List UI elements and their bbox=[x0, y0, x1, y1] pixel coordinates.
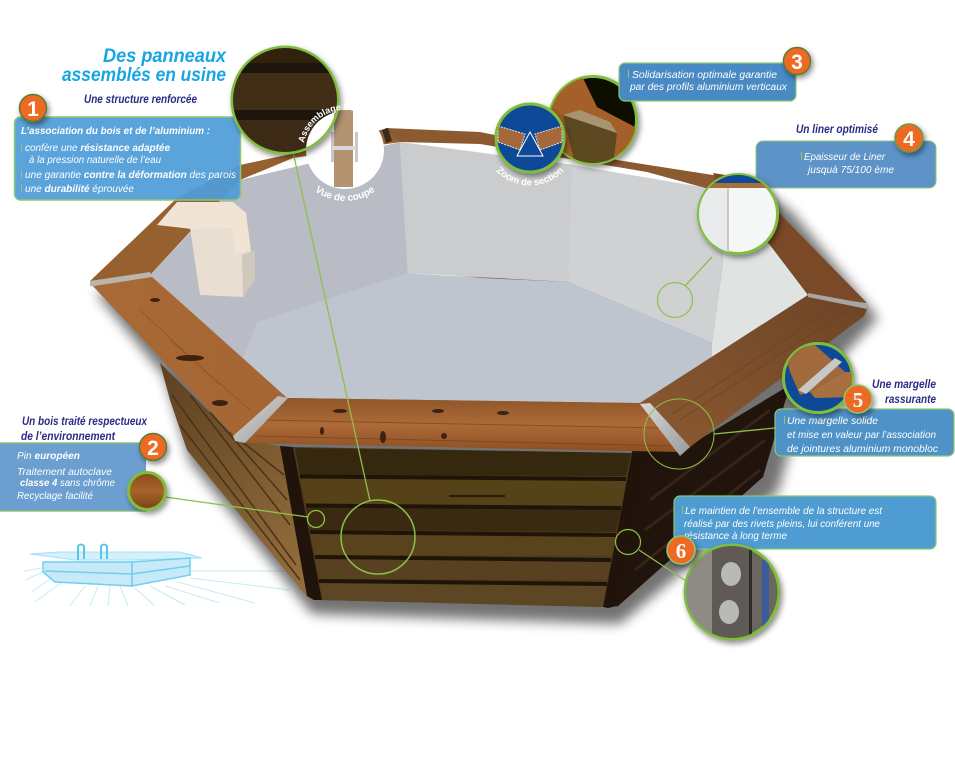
rim: upper left bbox=[90, 128, 400, 281]
heading: assemblés en usine bbox=[62, 65, 226, 86]
panel 5: margelle bbox=[775, 409, 954, 456]
liner floor bbox=[243, 273, 712, 403]
front wooden panel bbox=[293, 447, 632, 607]
badge 1 bbox=[20, 94, 46, 122]
vue de coupe circle: Vue de coupe bbox=[317, 185, 374, 201]
badge 2 bbox=[140, 434, 166, 460]
vue de coupe circle bbox=[306, 110, 384, 201]
panel 2: bois traité bbox=[0, 443, 146, 511]
margelle detail circle bbox=[784, 344, 855, 412]
badge 4 bbox=[895, 124, 923, 152]
assemblage label: Assemblage bois bbox=[298, 104, 353, 143]
panel 5: margelle: de jointures aluminium monobloc bbox=[787, 443, 939, 455]
badge 4: 4 bbox=[903, 128, 915, 151]
assemblage bois circle bbox=[228, 44, 346, 162]
heading bbox=[62, 46, 227, 86]
heading: margelle: Une margelle bbox=[872, 377, 936, 391]
badge 1: 1 bbox=[27, 98, 39, 121]
badge 3 bbox=[784, 48, 810, 74]
aluminium joints bbox=[90, 272, 152, 286]
heading: bois traité bbox=[21, 414, 148, 443]
panel 4: liner: Epaisseur de Liner bbox=[804, 151, 885, 163]
right dark wall bbox=[617, 385, 790, 607]
rim: front bbox=[245, 398, 680, 452]
rim: top bbox=[385, 128, 745, 192]
section zoom circle bbox=[496, 104, 564, 172]
panel 3: profils aluminium: par des profils aluminium verticaux bbox=[629, 81, 788, 93]
heading: margelle: rassurante bbox=[885, 392, 936, 406]
heading: bois traité: de l’environnement bbox=[21, 429, 116, 443]
panel 4: liner: jusquà 75/100 ème bbox=[806, 164, 894, 176]
panel 2: bois traité: Recyclage facilité bbox=[17, 490, 93, 502]
panel 2: bois traité: Traitement autoclave bbox=[17, 466, 112, 478]
heading: liner: Un liner optimisé bbox=[796, 122, 878, 136]
sub-heading: structure: Une structure renforcée bbox=[84, 92, 197, 106]
heading: bois traité: Un bois traité respectueux bbox=[22, 414, 148, 428]
left wooden wall bbox=[160, 363, 307, 596]
panel 5: margelle: et mise en valeur par l’association bbox=[787, 429, 936, 441]
panel 3: profils aluminium: Solidarisation optimale garantie bbox=[632, 69, 777, 81]
callout lines and thin circles bbox=[165, 152, 775, 581]
panel 1: structure: une garantie contre la déformation des parois bbox=[25, 169, 237, 181]
panel 4: liner bbox=[756, 141, 936, 188]
badge 6: 6 bbox=[676, 539, 686, 563]
section label: Zoom de section bbox=[496, 166, 564, 186]
panel 1: structure: L’association du bois et de l’aluminium : bbox=[21, 125, 210, 137]
panel 1: structure: confère une résistance adaptée bbox=[25, 142, 170, 154]
pool bbox=[90, 128, 868, 608]
panel 2: bois traité: classe 4 sans chrôme bbox=[20, 477, 115, 489]
badge 6 bbox=[667, 536, 695, 564]
panel 6: rivets: Le maintien de l’ensemble de la structure est bbox=[685, 505, 883, 517]
badge 5: 5 bbox=[853, 388, 863, 412]
corner posts bbox=[280, 446, 322, 600]
liner walls bbox=[150, 142, 808, 358]
badge 3: 3 bbox=[791, 51, 803, 74]
rivets detail circle bbox=[684, 545, 779, 640]
pool ground shadow bbox=[95, 180, 878, 624]
panel 2: bois traité: Pin européen bbox=[17, 450, 80, 462]
panel 6: rivets: réalisé par des rivets pleins, lui conférent une bbox=[684, 518, 880, 530]
badge 2: 2 bbox=[147, 437, 159, 460]
panel 5: margelle: Une margelle solide bbox=[787, 415, 878, 427]
panel 1: structure: à la pression naturelle de l’eau bbox=[29, 154, 161, 166]
margelle rim bbox=[90, 128, 868, 456]
badge 5 bbox=[844, 385, 872, 413]
panel 3: profils aluminium bbox=[619, 63, 796, 101]
liner detail circle bbox=[695, 172, 780, 258]
panel 1: structure: une durabilité éprouvée bbox=[25, 183, 134, 195]
panel 6: rivets bbox=[674, 496, 936, 549]
rim: upper right bbox=[713, 173, 867, 303]
panel 1: structure bbox=[14, 117, 240, 200]
panel 6: rivets: résistance à long terme bbox=[684, 530, 787, 542]
small pool illustration bbox=[24, 544, 290, 606]
heading: margelle bbox=[872, 377, 936, 406]
rim: left front bbox=[90, 275, 287, 443]
skimmer bbox=[157, 202, 255, 297]
section zoom detail circle bbox=[550, 76, 640, 165]
heading: Des panneaux bbox=[103, 46, 227, 67]
rim: lower right bbox=[640, 295, 868, 455]
wood sample circle bbox=[128, 472, 166, 510]
